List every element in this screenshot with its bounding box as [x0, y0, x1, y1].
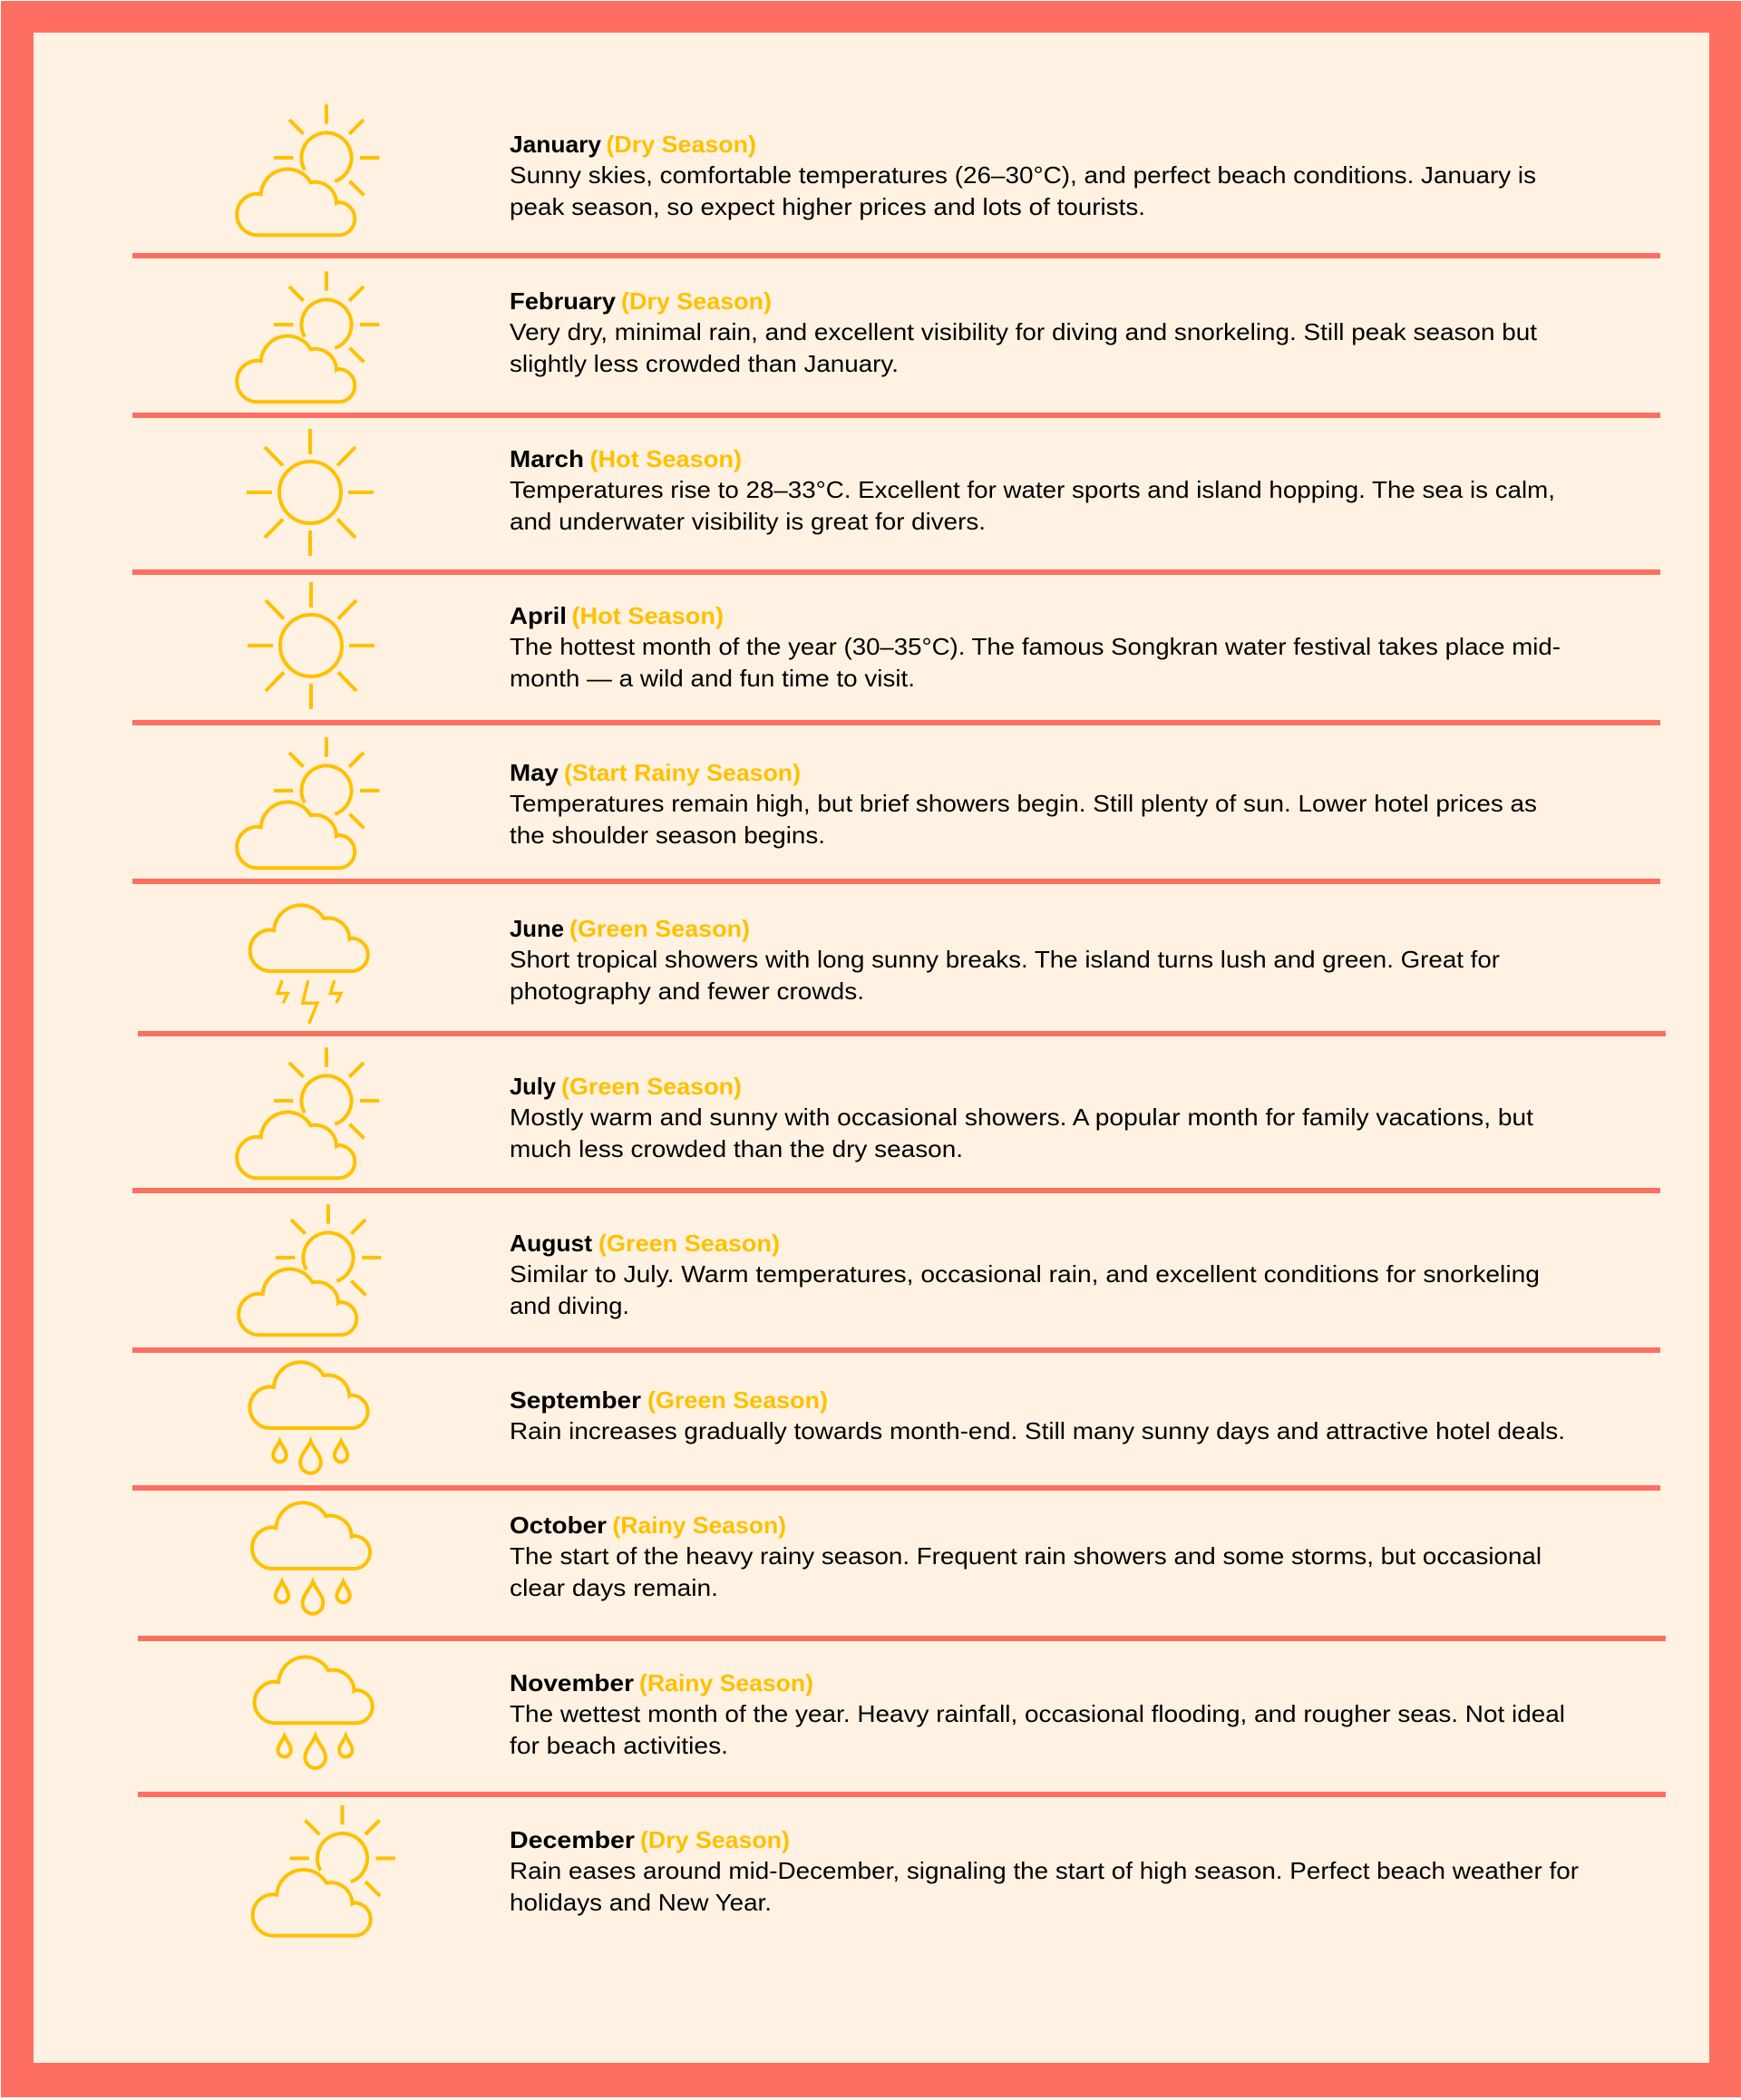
heading: January: January [510, 131, 602, 158]
description: April: month — a wild and fun time to visit. [510, 665, 915, 692]
heading: April: April [510, 602, 567, 629]
description: November: for beach activities. [510, 1732, 728, 1759]
icon: sun [247, 429, 374, 556]
description: January: Sunny skies, comfortable temperatures (26–30°C), and perfect beach conditions. January is [510, 161, 1536, 189]
icon: sun behind cloud [237, 737, 379, 868]
description: February: Very dry, minimal rain, and excellent visibility for diving and snorkeling. Still peak season but [510, 318, 1538, 345]
heading: August: August [510, 1230, 592, 1257]
description: October: clear days remain. [510, 1574, 718, 1601]
description: July: much less crowded than the dry season. [510, 1135, 963, 1162]
heading: October [510, 1512, 786, 1539]
panel: March [247, 429, 1555, 556]
heading: December: December [510, 1826, 635, 1853]
heading: September: September [510, 1386, 641, 1414]
description: September: Rain increases gradually towards month-end. Still many sunny days and attractive hotel deals. [510, 1417, 1565, 1444]
panel: May [237, 737, 1537, 868]
description: May: the shoulder season begins. [510, 822, 825, 849]
description: March [510, 476, 1555, 535]
description: April [510, 633, 1561, 692]
icon: sun behind cloud [237, 1047, 379, 1178]
panel: February [237, 271, 1538, 402]
description: May: Temperatures remain high, but brief showers begin. Still plenty of sun. Lower hotel prices as [510, 790, 1537, 817]
heading: September: (Green Season) [647, 1386, 828, 1414]
heading: December: (Dry Season) [640, 1826, 790, 1853]
description: July: Mostly warm and sunny with occasional showers. A popular month for family vacations, but [510, 1103, 1534, 1131]
heading: August: (Green Season) [598, 1230, 780, 1257]
heading: July: (Green Season) [561, 1073, 742, 1100]
heading: November: November [510, 1669, 634, 1697]
panel: January [237, 104, 1536, 235]
panel: July [237, 1047, 1534, 1178]
icon: sun [248, 582, 374, 709]
description: June: Short tropical showers with long sunny breaks. The island turns lush and green. Great for [510, 946, 1500, 973]
description: May [510, 790, 1537, 849]
heading: February: (Dry Season) [621, 287, 772, 315]
panel: June [250, 905, 1500, 1024]
heading: November [510, 1669, 813, 1697]
description: June [510, 946, 1500, 1005]
heading: June: (Green Season) [569, 915, 750, 942]
description: August [510, 1260, 1540, 1319]
heading: May: (Start Rainy Season) [564, 759, 801, 786]
heading: January [510, 131, 756, 158]
description: February: slightly less crowded than January. [510, 350, 899, 377]
heading: November: (Rainy Season) [639, 1669, 813, 1697]
icon: sun behind cloud [253, 1805, 395, 1936]
description: October: The start of the heavy rainy season. Frequent rain showers and some storms, but occasional [510, 1542, 1542, 1570]
description: August: and diving. [510, 1292, 629, 1319]
heading: February [510, 287, 772, 315]
description: March: Temperatures rise to 28–33°C. Excellent for water sports and island hopping. The sea is calm, [510, 476, 1555, 503]
heading: April: (Hot Season) [571, 602, 724, 629]
description: June: photography and fewer crowds. [510, 977, 864, 1005]
description: October [510, 1542, 1542, 1601]
icon: sun behind cloud [237, 271, 379, 402]
description: July [510, 1103, 1534, 1162]
heading: June: June [510, 915, 564, 942]
description: March: and underwater visibility is great for divers. [510, 508, 986, 535]
heading: April [510, 602, 724, 629]
description: April: The hottest month of the year (30–35°C). The famous Songkran water festival takes place mid- [510, 633, 1561, 660]
heading: July: July [510, 1073, 557, 1100]
heading: January: (Dry Season) [606, 131, 756, 158]
icon: rain cloud with drops [255, 1657, 373, 1768]
panel: December [253, 1805, 1579, 1936]
heading: August [510, 1230, 780, 1257]
description: December [510, 1857, 1579, 1916]
heading: February: February [510, 287, 617, 315]
icon: rain cloud with drops [250, 1362, 368, 1473]
heading: March: March [510, 445, 584, 472]
icon: sun behind cloud [237, 104, 379, 235]
icon: rain cloud with drops [252, 1502, 370, 1614]
description: November [510, 1700, 1565, 1759]
panel: September [250, 1362, 1565, 1473]
description: December: Rain eases around mid-December, signaling the start of high season. Perfect beach weather for [510, 1857, 1579, 1884]
heading: March [510, 445, 742, 472]
icon: sun behind cloud [238, 1204, 381, 1335]
heading: October: October [510, 1512, 607, 1539]
icon: storm cloud with lightning [250, 905, 368, 1024]
heading: September [510, 1386, 828, 1414]
panel: August [238, 1204, 1540, 1335]
description: January [510, 161, 1536, 220]
heading: March: (Hot Season) [589, 445, 742, 472]
panel: October [252, 1502, 1542, 1614]
description: November: The wettest month of the year. Heavy rainfall, occasional flooding, and rougher seas. Not ideal [510, 1700, 1565, 1727]
heading: October: (Rainy Season) [613, 1512, 786, 1539]
panel: April [248, 582, 1561, 709]
description: February [510, 318, 1538, 377]
description: January: peak season, so expect higher prices and lots of tourists. [510, 193, 1145, 220]
description: August: Similar to July. Warm temperatures, occasional rain, and excellent conditions for snorkeling [510, 1260, 1540, 1288]
description: December: holidays and New Year. [510, 1889, 772, 1916]
heading: May: May [510, 759, 559, 786]
panel: November [255, 1657, 1565, 1768]
heading: December [510, 1826, 790, 1853]
